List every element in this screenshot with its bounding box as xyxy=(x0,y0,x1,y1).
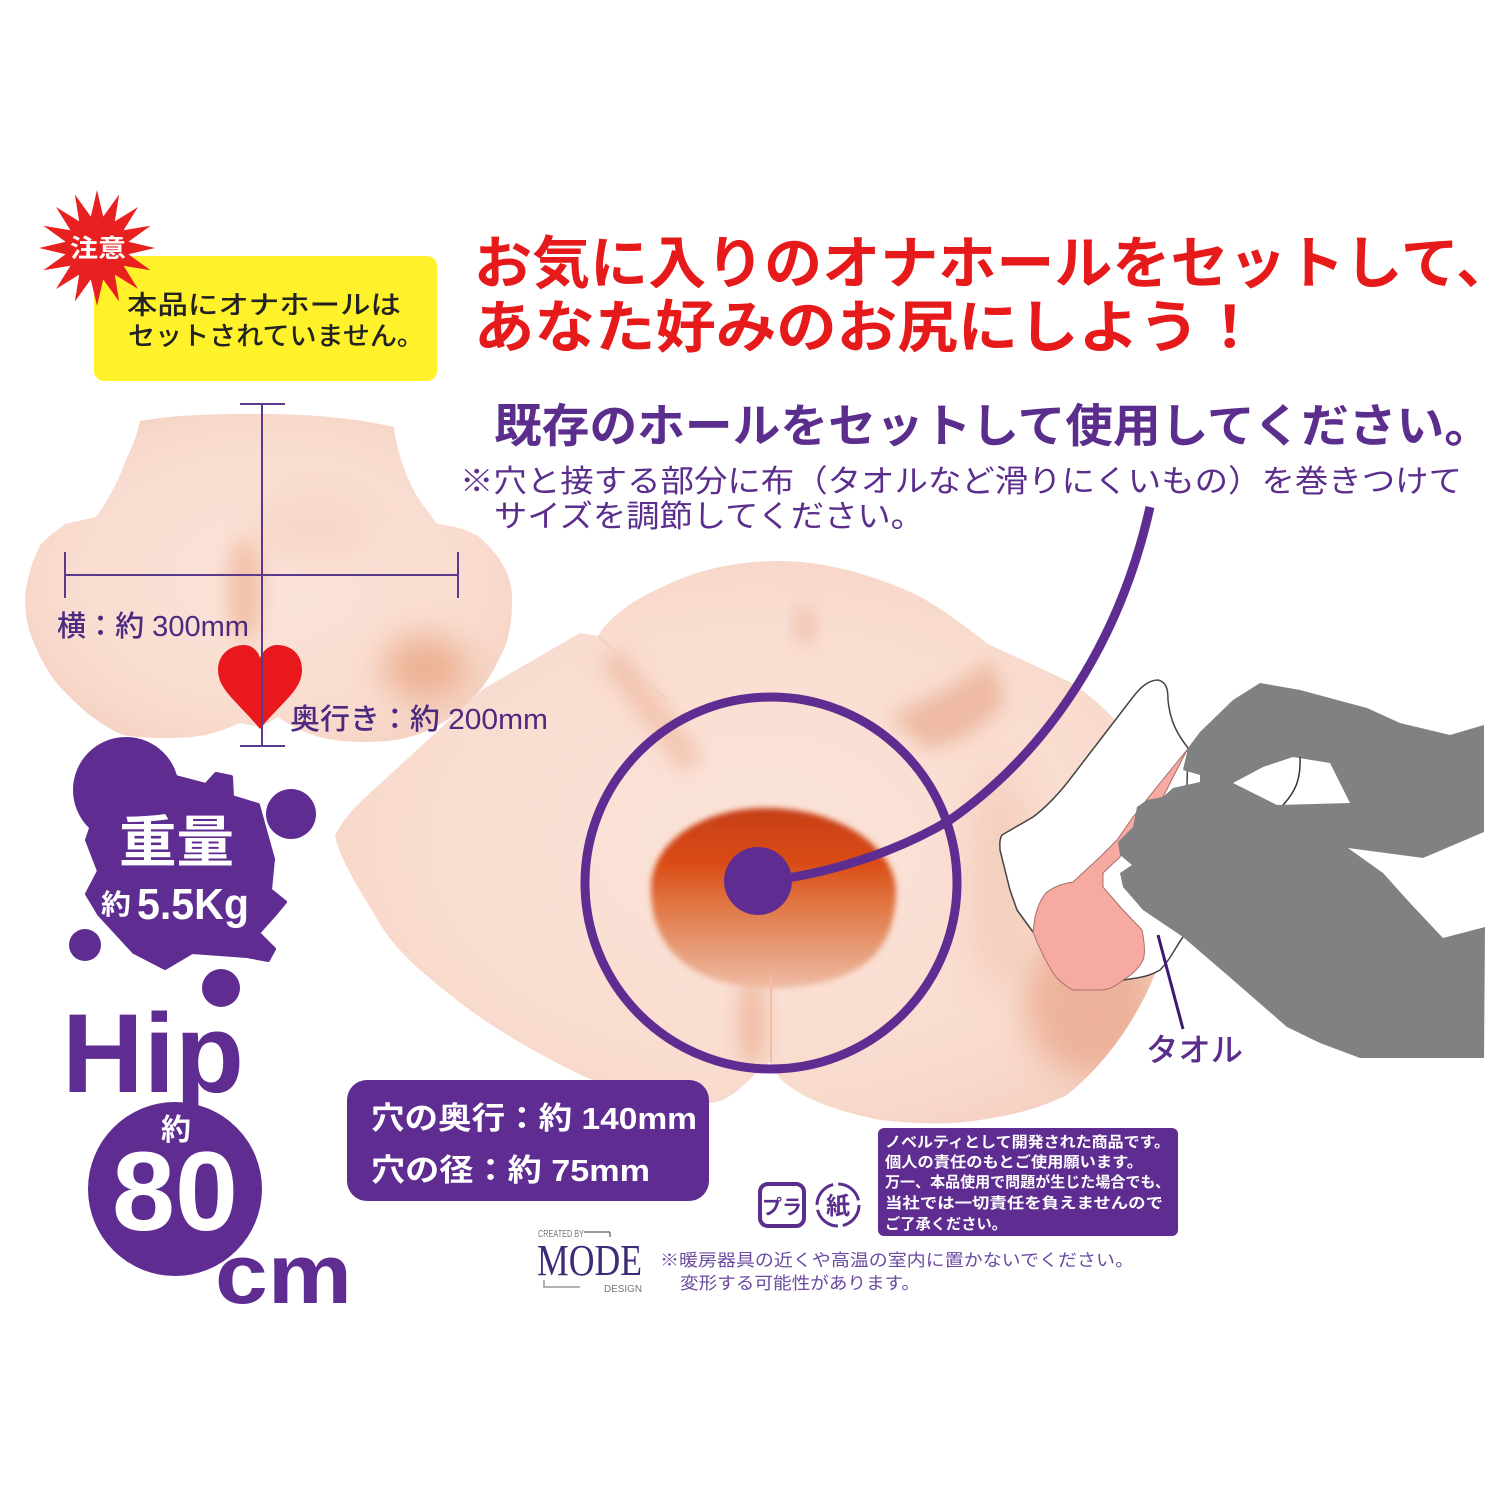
icon: plastic mark: プラ xyxy=(762,1196,802,1219)
hole dimensions panel xyxy=(347,1080,709,1201)
weight label: 重量 xyxy=(119,811,234,874)
logo bottom line xyxy=(544,1280,580,1287)
panel background xyxy=(878,1128,1178,1236)
Hip label: Hip xyxy=(62,991,244,1116)
vertical dimension line xyxy=(240,404,285,746)
product body xyxy=(335,561,1180,1123)
caution label: 注意 xyxy=(70,235,126,263)
icon: red heart xyxy=(218,645,302,729)
disclaimer text: 個人の責任のもとご使用願います。 xyxy=(885,1153,1143,1171)
headline: お気に入りのオナホールをセットして、 xyxy=(474,232,1500,296)
hole diameter: 穴の径：約 75mm xyxy=(371,1153,650,1188)
weight value: 約 xyxy=(101,889,131,920)
storage warning: 変形する可能性があります。 xyxy=(680,1274,920,1293)
hip value: 80 xyxy=(112,1129,238,1254)
brand logo: DESIGN xyxy=(604,1284,642,1295)
usage note: ※穴と接する部分に布（タオルなど滑りにくいもの）を巻きつけて xyxy=(460,464,1462,499)
towel pointer xyxy=(1158,935,1183,1029)
callout dot xyxy=(724,847,792,915)
lower split line xyxy=(770,975,772,1062)
usage note: サイズを調節してください。 xyxy=(494,499,924,534)
unit: cm xyxy=(215,1227,352,1321)
hip size badge xyxy=(62,991,352,1321)
disclaimer text: 万一、本品使用で問題が生じた場合でも、 xyxy=(885,1173,1170,1191)
callout line xyxy=(757,507,1150,882)
towel label: タオル xyxy=(1146,1032,1243,1068)
callout ring xyxy=(585,697,957,1069)
depth label: 奥行き：約 200mm xyxy=(290,703,548,736)
brand logo xyxy=(537,1229,642,1295)
weight value: 5.5Kg xyxy=(137,880,249,929)
product shading xyxy=(227,500,467,700)
caution text: セットされていません。 xyxy=(128,321,424,351)
caution note xyxy=(39,190,437,381)
insert xyxy=(1033,750,1187,990)
hole depth: 穴の奥行：約 140mm xyxy=(371,1101,697,1136)
storage warning xyxy=(660,1251,1134,1293)
caution text: 本品にオナホールは xyxy=(127,290,401,320)
yellow note panel xyxy=(94,256,437,381)
main product illustration xyxy=(335,507,1180,1123)
icon: red starburst xyxy=(39,190,155,306)
approx label: 約 xyxy=(161,1114,191,1147)
splat droplet xyxy=(69,929,101,961)
icon: paper mark: 紙 xyxy=(826,1193,850,1220)
storage warning: ※暖房器具の近くや高温の室内に置かないでください。 xyxy=(660,1251,1134,1270)
splat droplet xyxy=(266,789,316,839)
recycling marks xyxy=(760,1184,859,1226)
body shading xyxy=(598,605,1155,1075)
headline xyxy=(474,232,1500,360)
usage note xyxy=(460,464,1462,534)
towel edge between fingers xyxy=(1283,757,1300,805)
horizontal dimension line xyxy=(65,552,458,598)
hands xyxy=(1118,683,1485,1058)
weight badge xyxy=(69,737,316,1007)
disclaimer text: 当社では一切責任を負えませんので xyxy=(885,1194,1163,1212)
disclaimer text: ご了承ください。 xyxy=(885,1215,1007,1233)
disclaimer panel xyxy=(878,1128,1178,1236)
insert and hands illustration xyxy=(1000,680,1485,1068)
product top view xyxy=(25,414,512,742)
towel xyxy=(1000,680,1188,980)
headline: あなた好みのお尻にしよう！ xyxy=(474,296,1260,360)
splat droplet xyxy=(202,969,240,1007)
width label: 横：約 300mm xyxy=(57,610,249,643)
logo wordmark: MODE xyxy=(537,1236,642,1285)
disclaimer text: ノベルティとして開発された商品です。 xyxy=(885,1133,1170,1151)
disclaimer text xyxy=(885,1133,1170,1233)
logo top line: CREATED BY xyxy=(538,1229,584,1240)
purple splat xyxy=(73,737,285,968)
opening xyxy=(651,808,896,988)
small product diagram with dimensions xyxy=(25,404,512,746)
caution text xyxy=(127,290,424,351)
subheading: 既存のホールをセットして使用してください。 xyxy=(494,400,1492,452)
purple circle xyxy=(88,1102,262,1276)
panel background xyxy=(347,1080,709,1201)
